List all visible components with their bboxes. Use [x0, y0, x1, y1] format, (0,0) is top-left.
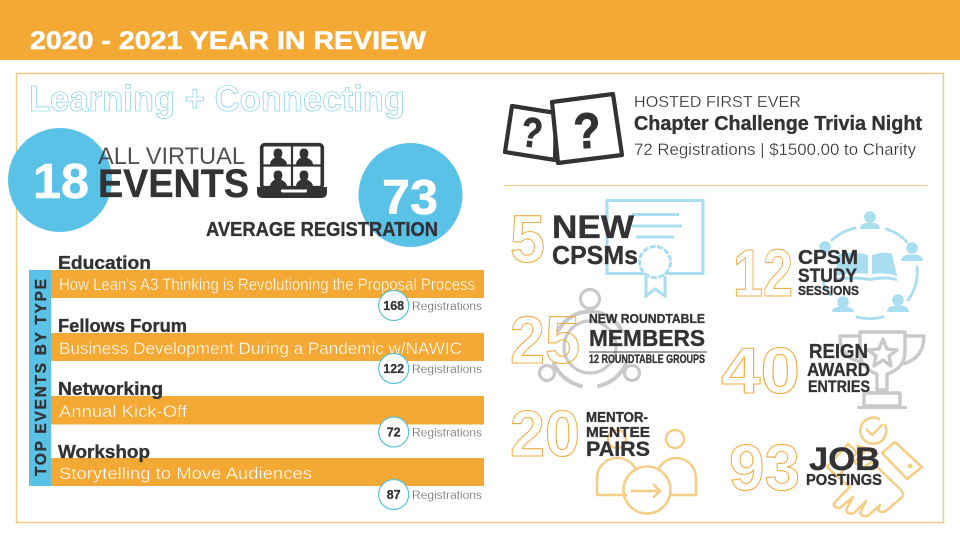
event: workshop: 87 — [387, 488, 401, 502]
event: workshop: Storytelling to Move Audiences — [59, 465, 312, 483]
stat: 12 CPSM study sessions: STUDY — [798, 266, 857, 287]
icon: roundtable — [540, 290, 640, 386]
stat: 40 reign award entries: ENTRIES — [808, 377, 870, 396]
stat: 18 all virtual events: ALL VIRTUAL — [98, 143, 245, 170]
stat: 93 job postings: POSTINGS — [806, 472, 882, 489]
stat: 12 CPSM study sessions: CPSM — [798, 247, 858, 269]
stat: 20 mentor-mentee pairs: MENTOR- — [586, 410, 648, 426]
title: 2020 - 2021 YEAR IN REVIEW — [30, 27, 426, 55]
event: workshop — [51, 442, 484, 510]
icon: trivia question cards: ? — [572, 102, 602, 160]
event: networking: Networking — [58, 379, 163, 399]
icon: mentor mentee — [597, 430, 696, 514]
trivia night text: 72 Registrations | $1500.00 to Charity — [634, 140, 916, 159]
event: education — [51, 253, 484, 320]
event: fellows forum — [51, 316, 484, 384]
stat: 18 all virtual events — [8, 128, 249, 232]
stat: 25 new roundtable members: 12 ROUNDTABLE GROUPS — [589, 354, 705, 366]
stat: 20 mentor-mentee pairs: PAIRS — [586, 438, 650, 461]
icon: handshake — [827, 418, 922, 516]
header band — [0, 0, 960, 60]
stat: 40 reign award entries: 40 — [721, 334, 800, 407]
event: workshop: Registrations — [412, 488, 482, 502]
icon: study group — [819, 211, 923, 319]
event: fellows forum: Business Development During a Pandemic w/NAWIC — [59, 340, 462, 358]
stat: 5 new CPSMs: NEW — [552, 209, 635, 245]
stat: 20 mentor-mentee pairs — [510, 397, 696, 514]
stat: 12 CPSM study sessions — [733, 211, 923, 319]
stat: 25 new roundtable members — [510, 290, 707, 386]
stat: 40 reign award entries: REIGN — [809, 341, 868, 363]
stat: 25 new roundtable members: MEMBERS — [589, 325, 705, 351]
event: education: How Lean's A3 Thinking is Revolutioning the Proposal Process — [59, 276, 475, 294]
stat: 20 mentor-mentee pairs: 20 — [510, 397, 580, 470]
stat: 18 all virtual events: 18 — [33, 155, 89, 209]
stat: 25 new roundtable members: 25 — [510, 303, 580, 378]
stat: 73 average registration: 73 — [382, 171, 438, 225]
sidebar label: TOP EVENTS BY TYPE — [33, 279, 50, 476]
event: fellows forum: 122 — [383, 362, 404, 376]
trivia night text: Chapter Challenge Trivia Night — [634, 113, 922, 135]
trivia night text — [634, 94, 922, 159]
stat: 25 new roundtable members: NEW ROUNDTABLE — [589, 311, 705, 326]
panel: top events by type — [29, 253, 484, 510]
stat: 5 new CPSMs: CPSMs — [552, 240, 638, 270]
event: networking: Annual Kick-Off — [59, 403, 187, 421]
stat: 12 CPSM study sessions: SESSIONS — [798, 284, 859, 298]
stat: 93 job postings: 93 — [729, 431, 800, 504]
event: education: 168 — [383, 299, 404, 313]
stat: 20 mentor-mentee pairs: MENTEE — [586, 424, 650, 441]
stat: 18 all virtual events: EVENTS — [98, 162, 249, 206]
icon: certificate — [607, 200, 703, 296]
stat: 93 job postings: JOB — [809, 441, 880, 477]
stat: 73 average registration — [206, 143, 462, 247]
event: fellows forum: Registrations — [412, 362, 482, 376]
event: fellows forum: Fellows Forum — [58, 316, 187, 336]
stat: 73 average registration: AVERAGE REGISTRATION — [206, 219, 438, 241]
stat: 40 reign award entries — [721, 332, 924, 408]
trivia night text: HOSTED FIRST EVER — [634, 94, 801, 111]
icon: trivia question cards: ? — [518, 108, 545, 157]
stat: 5 new CPSMs: 5 — [510, 202, 545, 277]
icon: trophy — [840, 332, 924, 408]
stat: 40 reign award entries: AWARD — [807, 359, 870, 380]
stat: 12 CPSM study sessions: 12 — [733, 236, 793, 311]
icon: laptop video call — [257, 145, 327, 198]
stat: 93 job postings — [729, 418, 922, 516]
stat: 5 new CPSMs — [510, 200, 703, 296]
event: workshop: Workshop — [58, 442, 150, 462]
event: education: Education — [58, 253, 151, 273]
event: networking: Registrations — [412, 426, 482, 440]
icon: trivia question cards — [505, 94, 622, 163]
event: networking: 72 — [387, 426, 401, 440]
event: networking — [51, 379, 484, 447]
event: education: Registrations — [412, 299, 482, 313]
heading: learning and connecting: Learning + Connecting — [29, 78, 405, 119]
